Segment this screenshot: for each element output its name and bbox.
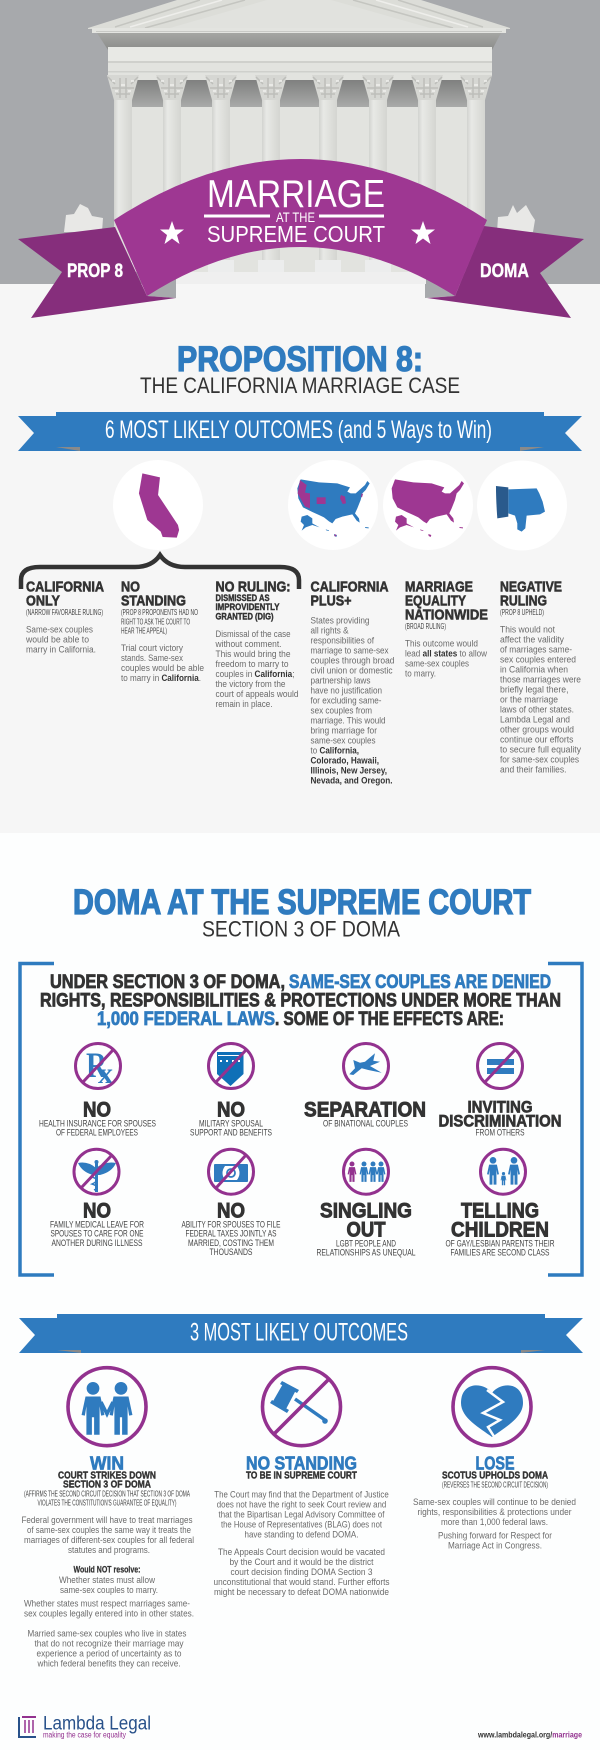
outcome: no standing: court decision finding DOMA Section 3	[230, 1567, 372, 1578]
bracket	[21, 555, 299, 589]
logo: lambda legal: making the case for equality	[43, 1731, 126, 1740]
icon: broken heart	[453, 1368, 531, 1446]
item: no joint taxes: NO	[217, 1200, 245, 1223]
outcome: lose: rights, responsibilities & protections under	[418, 1507, 572, 1518]
outcome: win: that do not recognize their marriage may	[34, 1639, 184, 1650]
column: negative ruling: of marriages same-	[500, 645, 572, 656]
column: california plus: sex couples from	[310, 705, 372, 716]
ribbon title: DOMA	[480, 261, 529, 282]
icon: airplane	[344, 1044, 388, 1088]
outcome: no standing: NO STANDING	[246, 1453, 357, 1473]
column: negative ruling: or the marriage	[500, 695, 558, 706]
column: no ruling: DISMISSED AS	[216, 593, 270, 603]
item: no military benefits	[190, 1099, 272, 1139]
column: marriage equality nationwide: (BROAD RULING)	[405, 622, 446, 631]
item: no military benefits: MILITARY SPOUSAL	[199, 1119, 263, 1130]
column: no ruling: couples in California;	[216, 669, 294, 680]
column: no standing: stands. Same-sex	[121, 653, 183, 664]
column: california plus: Illinois, New Jersey,	[310, 765, 387, 776]
statue right	[497, 205, 535, 232]
website url: www.lambdalegal.org/marriage	[477, 1731, 582, 1740]
column: no ruling	[215, 579, 298, 710]
outcome: win: Married same-sex couples who live in states	[28, 1629, 187, 1640]
item: inviting discrimination: FROM OTHERS	[476, 1128, 524, 1139]
item: inviting discrimination: DISCRIMINATION	[438, 1112, 562, 1131]
column: california plus: to California,	[310, 745, 359, 756]
column: negative ruling: to secure full equality	[500, 745, 581, 756]
ribbon	[18, 159, 584, 318]
item: no military benefits: SUPPORT AND BENEFITS	[190, 1128, 272, 1139]
outcome: no standing: have standing to defend DOMA.	[244, 1529, 358, 1540]
column: no standing	[121, 579, 204, 684]
subheading: california case: THE CALIFORNIA MARRIAGE CASE	[140, 373, 460, 398]
icon: no prescription: R	[86, 1045, 108, 1085]
column: marriage equality nationwide: same-sex couples	[405, 658, 469, 669]
icon: no gavel	[262, 1368, 340, 1446]
outcome: win: SECTION 3 OF DOMA	[63, 1480, 151, 1491]
icon: no prescription	[76, 1044, 120, 1090]
outcome: win: WIN	[90, 1453, 124, 1473]
outcome: no standing: might be necessary to defeat DOMA nationwide	[214, 1587, 389, 1598]
item: separation	[304, 1099, 426, 1130]
column: california plus: civil union or domestic	[310, 665, 393, 676]
outcome: lose: SCOTUS UPHOLDS DOMA	[442, 1470, 548, 1481]
column: negative ruling: those marriages were	[500, 675, 581, 686]
supreme court building	[88, 0, 510, 298]
statue left	[64, 204, 103, 232]
column: negative ruling: continue our efforts	[500, 735, 574, 746]
column: negative ruling	[500, 579, 581, 776]
column: marriage equality nationwide: NATIONWIDE	[405, 606, 488, 623]
outcome: no standing: by the Court and it would be the district	[230, 1557, 374, 1568]
column: no standing: couples would be able	[121, 663, 204, 674]
section background: proposition 8	[0, 284, 600, 833]
item: telling children: TELLING	[461, 1200, 539, 1223]
column: california plus: CALIFORNIA	[310, 579, 389, 596]
column: california plus: couples through broad	[310, 655, 394, 666]
ribbon title: AT THE	[276, 209, 315, 225]
bracket frame	[20, 964, 582, 1275]
item: no health insurance: NO	[83, 1099, 111, 1122]
column: california plus: Nevada, and Oregon.	[310, 775, 392, 786]
column: negative ruling: NEGATIVE	[500, 579, 562, 596]
column: negative ruling: other groups would	[500, 725, 574, 736]
column: no standing: RIGHT TO ASK THE COURT TO	[121, 617, 190, 626]
outcome: no standing: unconstitutional that would stand. Further efforts	[214, 1577, 390, 1588]
column: california plus: States providing	[310, 615, 370, 626]
column: marriage equality nationwide: EQUALITY	[405, 593, 466, 610]
icon: no equals	[478, 1044, 522, 1088]
icon: us map some states	[288, 460, 378, 550]
outcome: lose: Same-sex couples will continue to be denied	[413, 1497, 576, 1508]
item: no medical leave	[50, 1200, 144, 1249]
outcome: no standing	[214, 1453, 390, 1598]
column: california plus: marriage. This would	[310, 715, 386, 726]
item: telling children: FAMILIES ARE SECOND CLASS	[450, 1248, 550, 1259]
outcome: no standing: TO BE IN SUPREME COURT	[246, 1470, 357, 1481]
column: california only: CALIFORNIA	[26, 579, 104, 596]
item: telling children: OF GAY/LESBIAN PARENTS THEIR	[446, 1239, 555, 1250]
column: no standing: NO	[121, 579, 140, 596]
outcome: win: VIOLATES THE CONSTITUTION'S GUARANTEE OF EQUALITY)	[38, 1499, 177, 1508]
column: negative ruling: and their families.	[500, 765, 566, 776]
item: telling children	[446, 1200, 555, 1259]
column: no standing: HEAR THE APPEAL)	[121, 627, 167, 636]
icon: people singled out	[344, 1149, 388, 1194]
column: california plus: same-sex couples	[310, 735, 376, 746]
outcome: win: Whether states must allow	[59, 1575, 155, 1586]
item: no military benefits: NO	[217, 1099, 245, 1122]
outcome: win: same-sex couples to marry.	[60, 1585, 158, 1596]
column: marriage equality nationwide: lead all states to allow	[405, 648, 487, 659]
column: california only: Same-sex couples	[26, 625, 93, 636]
column: marriage equality nationwide	[405, 579, 488, 679]
item: telling children: CHILDREN	[451, 1219, 549, 1242]
item: no joint taxes	[182, 1200, 280, 1258]
icon: no prescription: x	[98, 1057, 113, 1090]
column: california plus: for excluding same-	[310, 695, 382, 706]
icon: no money	[208, 1149, 254, 1194]
item: no joint taxes: FEDERAL TAXES JOINTLY AS	[186, 1229, 276, 1240]
item: no medical leave: ANOTHER DURING ILLNESS	[52, 1238, 142, 1249]
ribbon title: MARRIAGE	[207, 173, 385, 216]
item: no medical leave: NO	[83, 1200, 111, 1223]
item: no joint taxes: THOUSANDS	[210, 1247, 252, 1258]
outcome: win: sex couples legally entered into in other states.	[24, 1609, 194, 1620]
column: california plus	[310, 579, 394, 786]
item: no health insurance: OF FEDERAL EMPLOYEES	[56, 1128, 138, 1139]
column: no standing: (PROP 8 PROPONENTS HAD NO	[121, 608, 198, 617]
outcome: lose: Marriage Act in Congress.	[448, 1541, 542, 1552]
column: no standing: STANDING	[121, 593, 186, 610]
item: singling out: LGBT PEOPLE AND	[336, 1239, 396, 1250]
outcome: no standing: does not have the right to seek Court review and	[217, 1499, 386, 1510]
item: singling out: OUT	[346, 1219, 386, 1242]
column: marriage equality nationwide: MARRIAGE	[405, 579, 473, 596]
banner: 3 most likely outcomes: 3 MOST LIKELY OUTCOMES	[190, 1319, 408, 1347]
icon: california	[113, 460, 203, 550]
logo: lambda legal	[19, 1713, 151, 1740]
statement: 1,000 FEDERAL LAWS	[97, 1009, 275, 1030]
outcome: win: marriages of different-sex couples for all federal	[24, 1535, 194, 1546]
statement: . SOME OF THE EFFECTS ARE:	[275, 1009, 504, 1030]
column: no ruling: This would bring the	[216, 649, 290, 660]
outcome: win	[22, 1453, 194, 1670]
outcome: win: (AFFIRMS THE SECOND CIRCUIT DECISION THAT SECTION 3 OF DOMA	[24, 1490, 190, 1499]
column: california only: marry in California.	[26, 645, 96, 656]
item: singling out	[316, 1200, 416, 1259]
item: inviting discrimination: INVITING	[468, 1097, 532, 1116]
column: negative ruling: Lambda Legal and	[500, 715, 570, 726]
column: no ruling: the victory from the	[216, 679, 286, 690]
outcome: win: which federal benefits they can receive.	[37, 1659, 181, 1670]
column: california plus: bring marriage for	[310, 725, 378, 736]
outcome: win: Would NOT resolve:	[74, 1565, 140, 1576]
column: california plus: Colorado, Hawaii,	[310, 755, 379, 766]
column: negative ruling: (PROP 8 UPHELD)	[500, 608, 544, 617]
column: california plus: PLUS+	[310, 593, 352, 610]
column: negative ruling: RULING	[500, 593, 547, 610]
column: california only: (NARROW FAVORABLE RULING)	[26, 608, 103, 617]
column: no ruling: IMPROVIDENTLY	[216, 602, 280, 612]
outcome: win: of same-sex couples the same way it treats the	[27, 1525, 191, 1536]
statement: SAME-SEX COUPLES ARE DENIED	[289, 972, 551, 993]
outcome: lose: more than 1,000 federal laws.	[441, 1517, 548, 1528]
item: singling out: SINGLING	[320, 1200, 412, 1223]
outcome: no standing: The Appeals Court decision would be vacated	[218, 1547, 385, 1558]
outcome: no standing: that the Bipartisan Legal Advisory Committee of	[218, 1509, 385, 1520]
column: no ruling: freedom to marry to	[216, 659, 288, 670]
column: california only: ONLY	[26, 593, 60, 610]
column: negative ruling: for same-sex couples	[500, 755, 579, 766]
column: no standing: Trial court victory	[121, 643, 183, 654]
item: no joint taxes: MARRIED, COSTING THEM	[188, 1238, 274, 1249]
item: no joint taxes: ABILITY FOR SPOUSES TO FILE	[182, 1220, 280, 1231]
icon: no military support	[208, 1044, 254, 1088]
column: no ruling: Dismissal of the case	[216, 629, 290, 640]
item: no health insurance	[39, 1099, 156, 1139]
column: california only	[25, 579, 104, 656]
statement: UNDER SECTION 3 OF DOMA,	[50, 972, 285, 993]
icon: thumbs down	[477, 460, 567, 550]
logo: lambda legal: Lambda Legal	[43, 1713, 151, 1734]
item: inviting discrimination	[438, 1097, 562, 1139]
column: marriage equality nationwide: to marry.	[405, 668, 436, 679]
column: negative ruling: briefly legal there,	[500, 685, 568, 696]
outcome: win: experience a period of uncertainty as to	[36, 1649, 182, 1660]
column: no ruling: court of appeals would	[216, 689, 298, 700]
subheading: section 3: SECTION 3 OF DOMA	[202, 917, 400, 942]
column: california plus: have no justification	[310, 685, 382, 696]
column: no ruling: without comment.	[215, 639, 282, 650]
outcome: win: Federal government will have to treat marriages	[22, 1515, 193, 1526]
outcome: win: Whether states must respect marriages same-	[24, 1599, 190, 1610]
item: singling out: RELATIONSHIPS AS UNEQUAL	[316, 1248, 416, 1259]
column: california plus: all rights &	[310, 625, 349, 636]
outcome: lose: Pushing forward for Respect for	[438, 1531, 553, 1542]
outcome: lose	[413, 1453, 576, 1552]
column: negative ruling: sex couples entered	[500, 655, 576, 666]
column: california plus: marriage to same-sex	[310, 645, 389, 656]
header background	[0, 0, 600, 284]
outcome: win: COURT STRIKES DOWN	[58, 1470, 156, 1481]
column: no ruling: GRANTED (DIG)	[216, 611, 274, 621]
item: separation: OF BINATIONAL COUPLES	[323, 1119, 408, 1130]
ribbon title	[67, 173, 529, 282]
item: separation: SEPARATION	[304, 1099, 426, 1122]
heading: proposition 8: PROPOSITION 8:	[177, 340, 423, 379]
item: no medical leave: FAMILY MEDICAL LEAVE FOR	[50, 1220, 144, 1231]
column: california plus: partnership laws	[310, 675, 371, 686]
column: california only: would be able to	[25, 635, 89, 646]
column: california plus: responsibilities of	[310, 635, 374, 646]
column: marriage equality nationwide: This outcome would	[405, 638, 478, 649]
icon: no medical	[74, 1149, 119, 1194]
item: no health insurance: HEALTH INSURANCE FOR SPOUSES	[39, 1119, 156, 1130]
outcome: no standing: the House of Representatives (BLAG) does not	[221, 1519, 382, 1530]
column: negative ruling: affect the validity	[500, 635, 564, 646]
banner: 3 most likely outcomes	[19, 1314, 583, 1353]
column: negative ruling: laws of other states.	[500, 705, 574, 716]
outcome: no standing: The Court may find that the Department of Justice	[214, 1489, 389, 1500]
column: no ruling: remain in place.	[216, 699, 272, 710]
icon: family	[480, 1149, 526, 1194]
banner: 6 most likely outcomes	[18, 412, 582, 451]
column: negative ruling: This would not	[500, 625, 555, 636]
statement	[40, 972, 561, 1030]
column: no standing: to marry in California.	[121, 673, 201, 684]
ribbon title: PROP 8	[67, 261, 123, 282]
outcome: lose: LOSE	[476, 1453, 514, 1473]
column: no ruling: NO RULING:	[216, 579, 290, 596]
item: no medical leave: SPOUSES TO CARE FOR ONE	[50, 1229, 144, 1240]
outcome: win: statutes and programs.	[68, 1545, 150, 1556]
column: negative ruling: in California when	[500, 665, 568, 676]
icon: us map nationwide	[383, 460, 473, 550]
ribbon title: SUPREME COURT	[207, 221, 385, 247]
icon: couple	[68, 1368, 146, 1446]
